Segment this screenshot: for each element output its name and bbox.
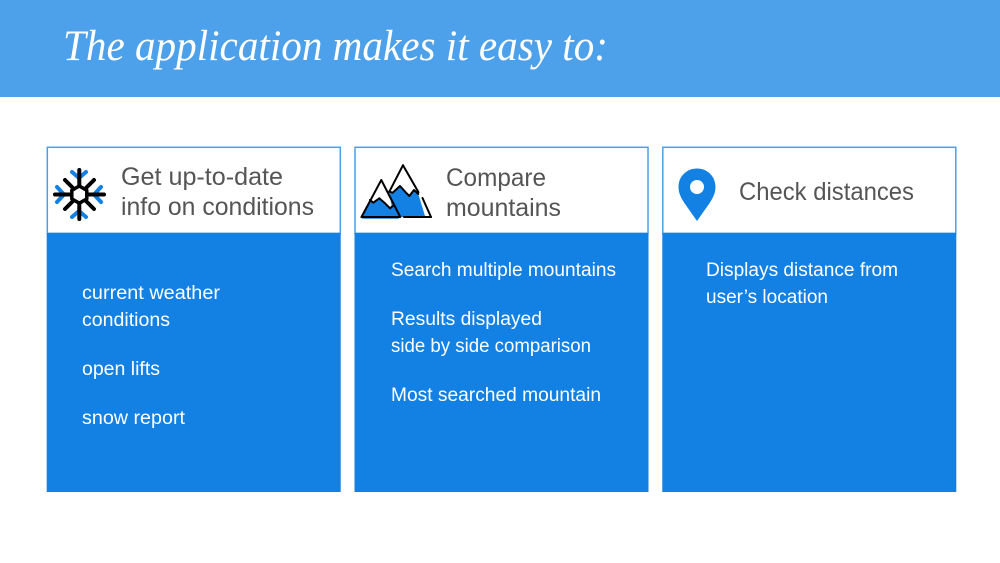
list: distances: user’s location <box>706 287 828 308</box>
heading: mountains: Compare <box>446 164 546 192</box>
list: conditions: open lifts <box>82 359 160 380</box>
list: distances: Displays distance from <box>706 260 898 281</box>
panel header: mountains <box>355 147 648 233</box>
heading: conditions: Get up-to-date <box>121 163 283 191</box>
list: conditions: current weather <box>82 283 221 304</box>
panel header: conditions <box>47 147 340 233</box>
list: conditions <box>82 283 221 429</box>
panel: conditions <box>47 147 341 492</box>
list: mountains <box>391 260 616 406</box>
icon: mountains <box>362 165 431 219</box>
list: mountains: Most searched mountain <box>391 385 601 406</box>
heading: conditions <box>121 163 314 221</box>
heading: conditions: info on conditions <box>121 193 314 221</box>
heading: mountains: mountains <box>446 194 561 222</box>
heading: distances: Check distances <box>739 178 914 206</box>
list: mountains: Search multiple mountains <box>391 260 616 281</box>
panel body: conditions <box>47 233 341 492</box>
list: conditions: conditions <box>82 310 170 331</box>
icon: location pin <box>678 168 716 221</box>
heading: mountains <box>446 164 561 222</box>
panel: distances <box>662 147 956 492</box>
list: conditions: snow report <box>82 408 186 429</box>
title: The application makes it easy to: <box>63 23 608 70</box>
icon: snowflake <box>55 170 104 219</box>
panel header: distances <box>663 147 956 233</box>
list: distances <box>706 260 898 308</box>
header banner <box>0 0 1000 97</box>
panel body: distances <box>662 233 956 492</box>
panel: mountains <box>354 147 648 492</box>
list: mountains: side by side comparison <box>391 336 591 357</box>
panel body: mountains <box>354 233 648 492</box>
list: mountains: Results displayed <box>391 309 542 330</box>
